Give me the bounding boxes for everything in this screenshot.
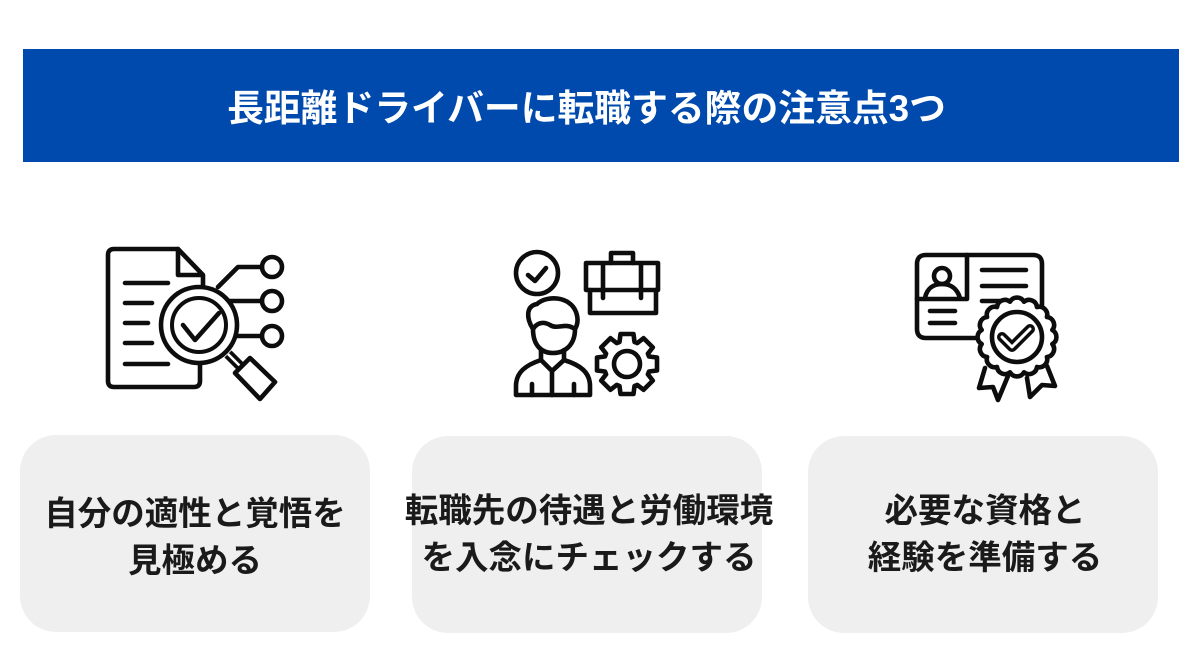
icon: ID card with certification badge — [917, 255, 1056, 400]
text: working conditions: 転職先の待遇と労働環境 — [405, 493, 773, 530]
text: self-assessment second line: 見極める — [128, 543, 262, 580]
title banner: 長距離ドライバーに転職する際の注意点3つ — [227, 88, 946, 129]
icon: worker with check, briefcase and gear — [516, 252, 658, 395]
panel: qualifications — [808, 436, 1158, 633]
panel: working conditions — [412, 436, 762, 633]
text: qualifications: 必要な資格と — [884, 493, 1086, 530]
text: qualifications second line: 経験を準備する — [868, 540, 1102, 577]
icon: document with magnifier and check — [108, 249, 282, 399]
panel: self-assessment — [20, 435, 370, 632]
text: self-assessment: 自分の適性と覚悟を — [44, 496, 346, 533]
text: working conditions second line: を入念にチェックする — [422, 540, 756, 577]
title banner — [23, 49, 1179, 162]
